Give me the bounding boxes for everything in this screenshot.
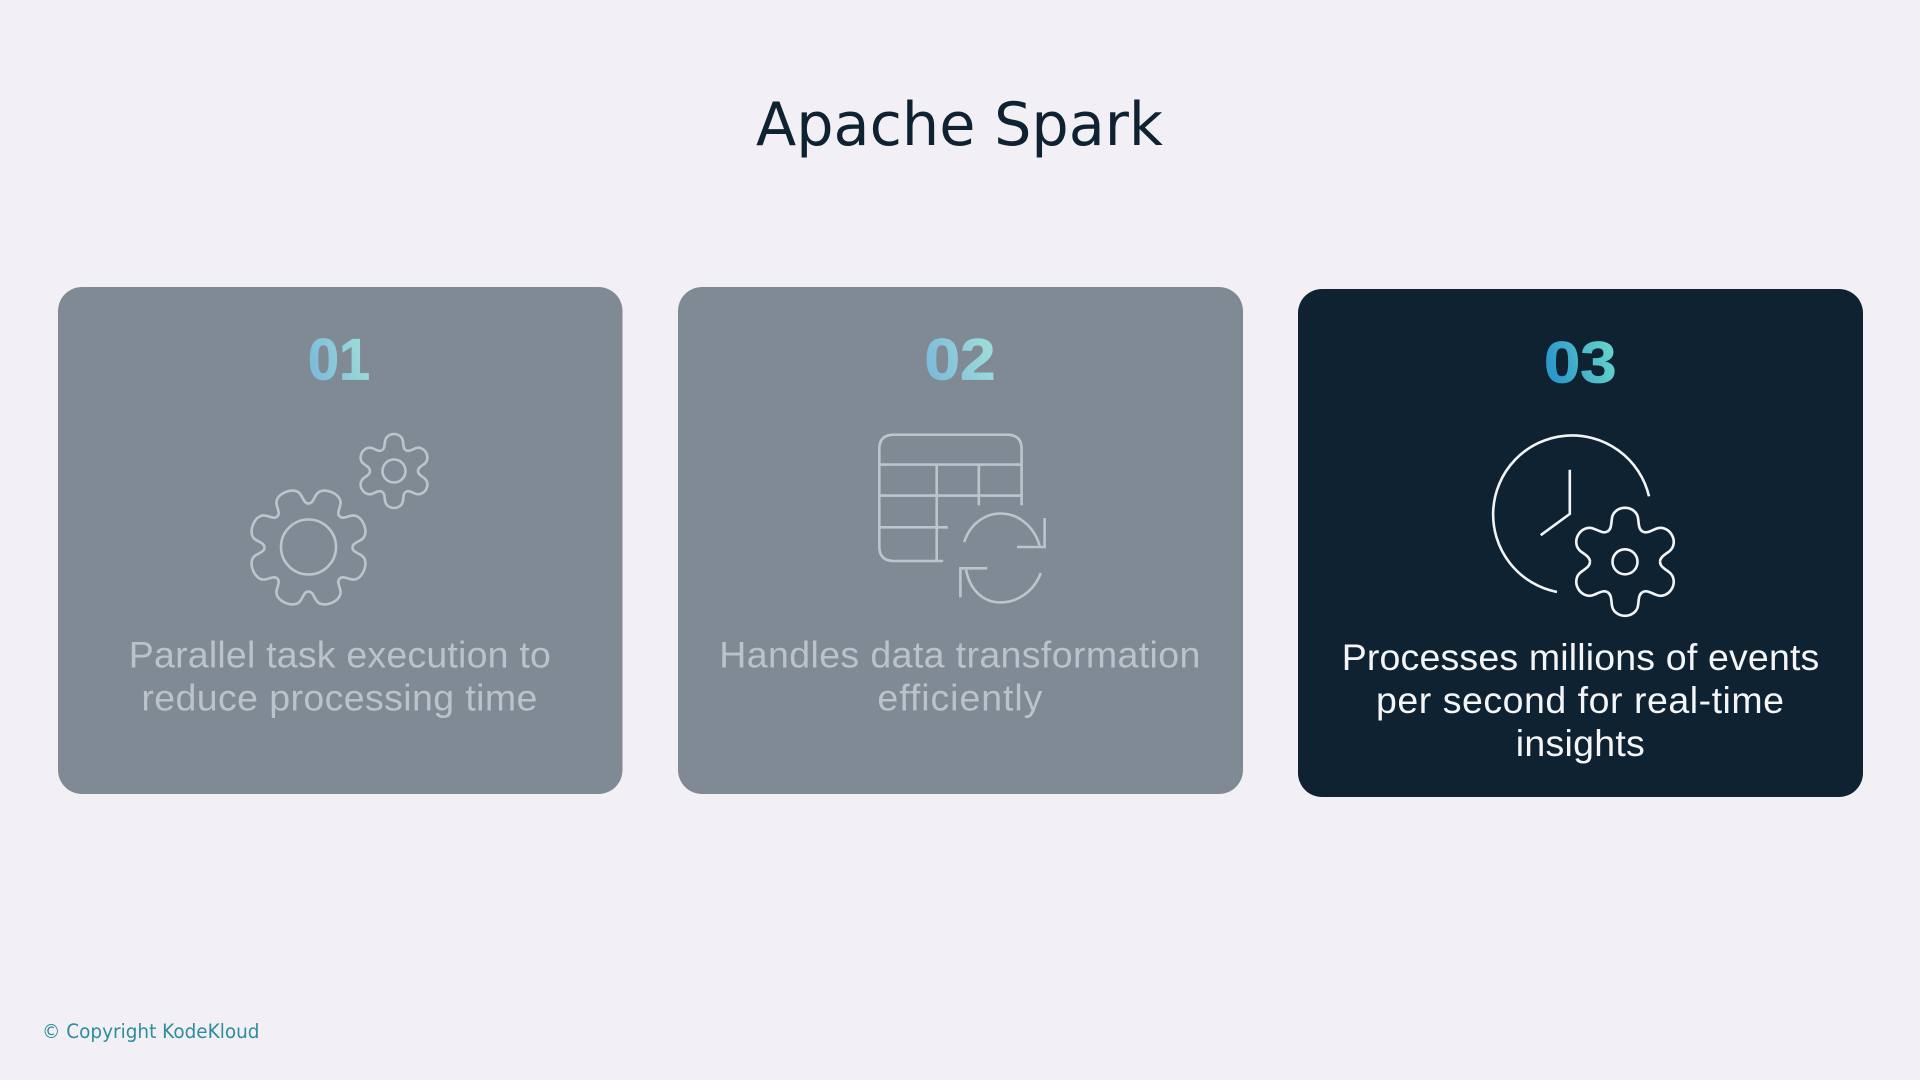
panel: card 03 real-time events [1298,289,1863,797]
description 03: insights [1516,722,1645,764]
description 01: Parallel task execution to [129,634,551,676]
description 01 [129,634,551,718]
number 02: 02 [924,328,996,392]
copyright footer: © Copyright KodeKloud [42,1020,260,1043]
panel: card 01 parallel tasks [58,287,622,794]
icon: table with refresh arrows [879,435,1045,602]
description 02: Handles data transformation [719,634,1200,676]
title: Apache Spark [756,90,1163,160]
description 03 [1342,636,1819,764]
description 02: efficiently [877,676,1043,718]
description 03: Processes millions of events [1342,636,1819,678]
icon: clock with gear [1493,435,1681,616]
number 03: 03 [1544,330,1616,396]
description 02 [719,634,1200,718]
icon: gears [247,434,432,609]
number 01: 01 [308,328,370,392]
description 01: reduce processing time [141,676,537,718]
panel: card 02 data transformation [678,287,1243,794]
description 03: per second for real-time [1376,679,1784,721]
